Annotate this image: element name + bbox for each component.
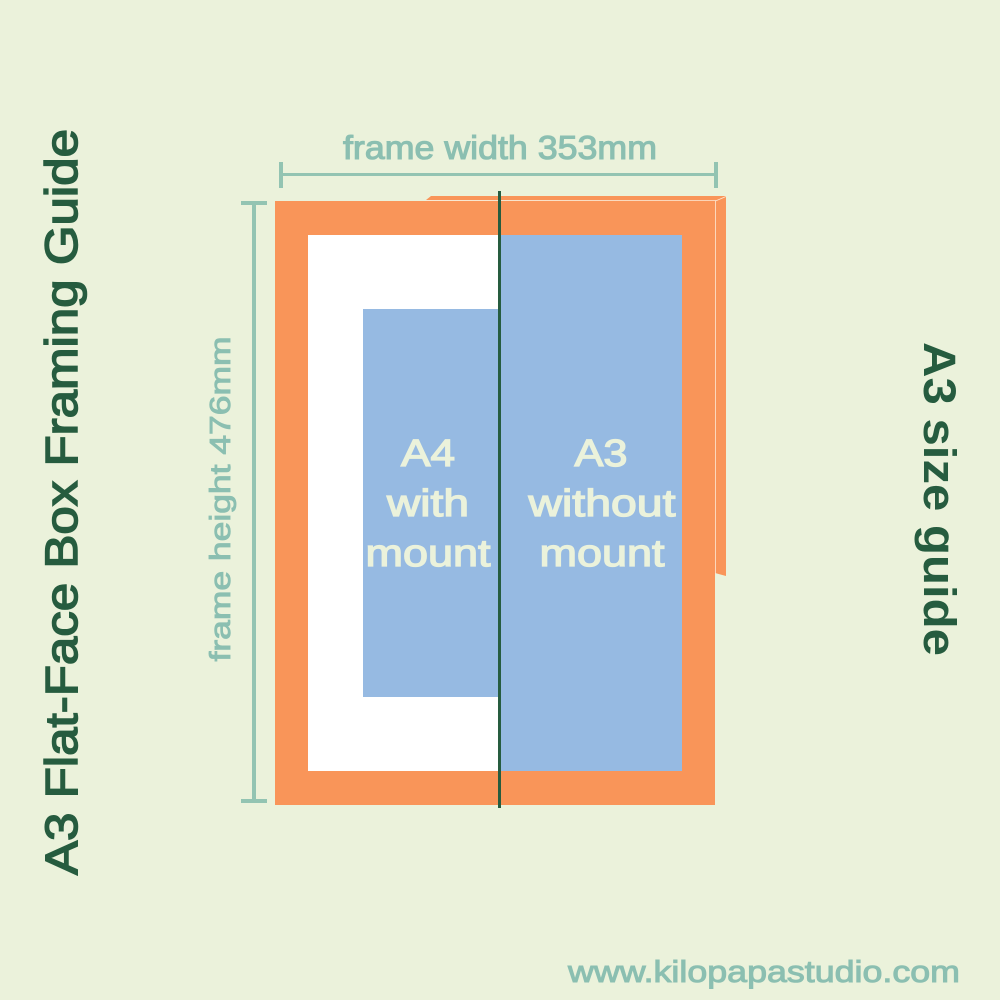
frame side depth bbox=[426, 196, 726, 576]
A3 label: mount bbox=[540, 533, 665, 575]
title: A3 Flat-Face Box Framing Guide bbox=[36, 129, 87, 875]
A3 artwork panel bbox=[499, 235, 682, 771]
orange frame bbox=[275, 201, 715, 805]
frame width label: frame width 353mm bbox=[343, 129, 657, 166]
A4 label: with bbox=[386, 483, 469, 525]
A3 label: without bbox=[527, 483, 676, 525]
subtitle: A3 size guide: A3 size guide bbox=[914, 342, 965, 656]
A4 label: mount bbox=[366, 533, 491, 575]
white mount bbox=[308, 235, 499, 771]
frame height dimension bbox=[205, 201, 267, 803]
A4 label: A4 bbox=[401, 433, 455, 475]
frame height label: frame height 476mm bbox=[205, 336, 237, 662]
centre divider line bbox=[498, 191, 501, 808]
frame width dimension bbox=[279, 129, 718, 188]
website URL: www.kilopapastudio.com bbox=[567, 954, 960, 989]
A3 label: A3 bbox=[574, 433, 628, 475]
A4 artwork panel bbox=[363, 309, 499, 697]
